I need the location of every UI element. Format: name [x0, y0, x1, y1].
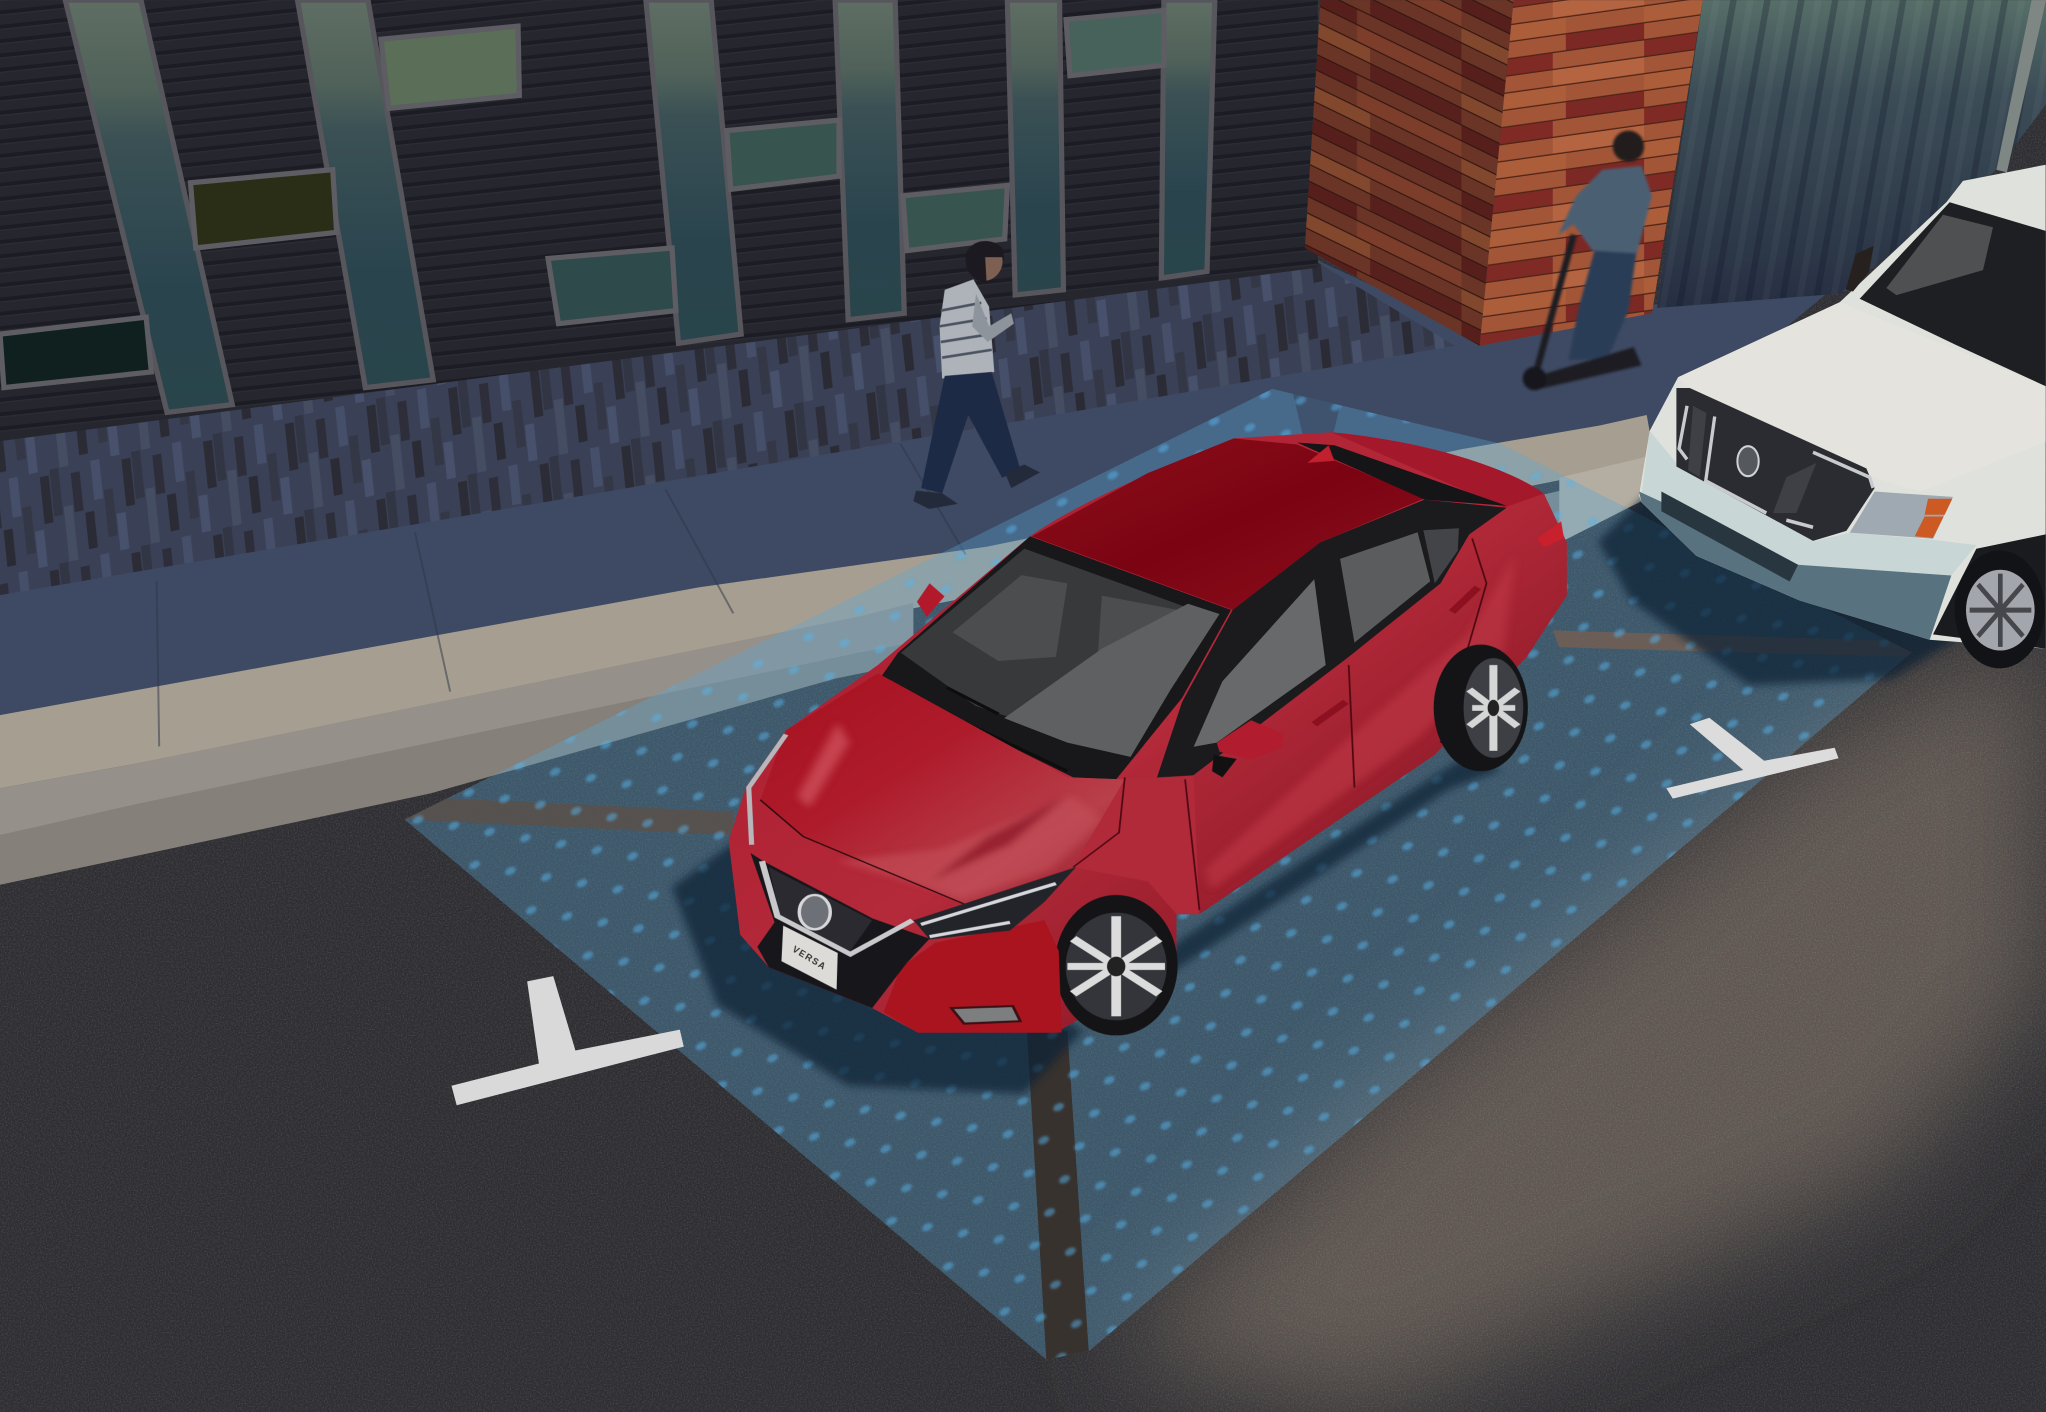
head: [1613, 131, 1644, 162]
strips across the zone: [405, 164, 2046, 1360]
wipers: [930, 687, 1067, 771]
van headlight: [1850, 492, 1953, 539]
curb right section: [1559, 457, 1647, 543]
van mirror: [1846, 246, 1874, 292]
head: [966, 241, 1004, 282]
shoes: [913, 465, 1040, 509]
van wheel: [1955, 550, 2045, 668]
hood edge line: [760, 800, 964, 904]
red car: Nissan Versa: [729, 432, 1567, 1035]
car shadow: [672, 496, 1957, 1094]
right mirror: [1212, 720, 1283, 777]
small windows: [0, 11, 1164, 388]
van lower fascia: [1641, 431, 1976, 575]
fog lamp: [951, 1006, 1020, 1024]
legs: [1568, 251, 1636, 360]
side window frame: [1156, 500, 1507, 779]
glass strips: [65, 0, 1215, 412]
brick pillar: [1305, 0, 1703, 346]
shirt: [939, 279, 994, 378]
person on scooter: [1523, 131, 1652, 390]
rear wheel: [1434, 645, 1528, 771]
car body: [729, 432, 1567, 1033]
gutter strip beside curb: [0, 483, 1644, 885]
windshield: [878, 536, 1231, 779]
van body: [1639, 165, 2046, 649]
door lines and handles: [1073, 538, 1486, 910]
hood highlights: [798, 722, 1102, 898]
chrome V motion: [762, 861, 912, 954]
lower bumper: [1639, 492, 1951, 640]
rear window: [1297, 442, 1507, 506]
dark grille pillars: [1688, 406, 1816, 513]
parking mark left: [451, 976, 684, 1105]
Nissan logo: [799, 895, 830, 929]
scooter: [1534, 235, 1574, 378]
van logo: [1737, 446, 1759, 476]
arm: [972, 294, 1014, 342]
curb: [0, 603, 913, 835]
upper grille mesh: [769, 867, 872, 951]
wheel arch: [1933, 534, 2046, 649]
tail lamp: [1537, 521, 1564, 547]
paver walkway: [0, 255, 1455, 595]
jeans: [921, 372, 1020, 493]
windshield: [1860, 202, 2046, 386]
torso: [1558, 166, 1652, 256]
front bumper: [884, 920, 1062, 1033]
headlight: [913, 867, 1076, 939]
shirt stripes: [939, 303, 992, 358]
plate text: VERSA: [791, 944, 828, 972]
front fender: [1073, 775, 1199, 914]
building facade: [0, 0, 1318, 441]
quarter window: [1423, 528, 1459, 583]
licence plate: [781, 926, 838, 990]
lower grille: [750, 853, 930, 1008]
rear deck: [1331, 432, 1544, 508]
pedestrian with phone: [913, 241, 1040, 509]
door panel highlight: [1205, 555, 1515, 890]
white van: [1639, 165, 2046, 668]
left mirror: [917, 583, 945, 617]
antenna: [1307, 445, 1334, 463]
front side window: [1194, 579, 1326, 747]
van grille: [1676, 388, 1875, 541]
sidewalk: [0, 255, 2046, 790]
windshield reflection: [1004, 604, 1220, 757]
bumper slot: [1661, 492, 1798, 582]
rear side window: [1340, 532, 1430, 643]
corrugated metal wall: [1657, 0, 2046, 308]
hood: [760, 673, 1125, 904]
roof: [1032, 438, 1424, 610]
cabin interior: [901, 549, 1217, 757]
chrome side strip: [749, 734, 786, 845]
parking mark right: [1666, 718, 1839, 799]
van hood: [1678, 302, 2046, 492]
van interior: [1886, 215, 1993, 295]
front wheel: [1055, 895, 1178, 1035]
face: [985, 257, 1003, 281]
chrome grille bars: [1679, 406, 1873, 527]
seats: [953, 575, 1188, 681]
sensor zone: [404, 389, 1911, 1360]
